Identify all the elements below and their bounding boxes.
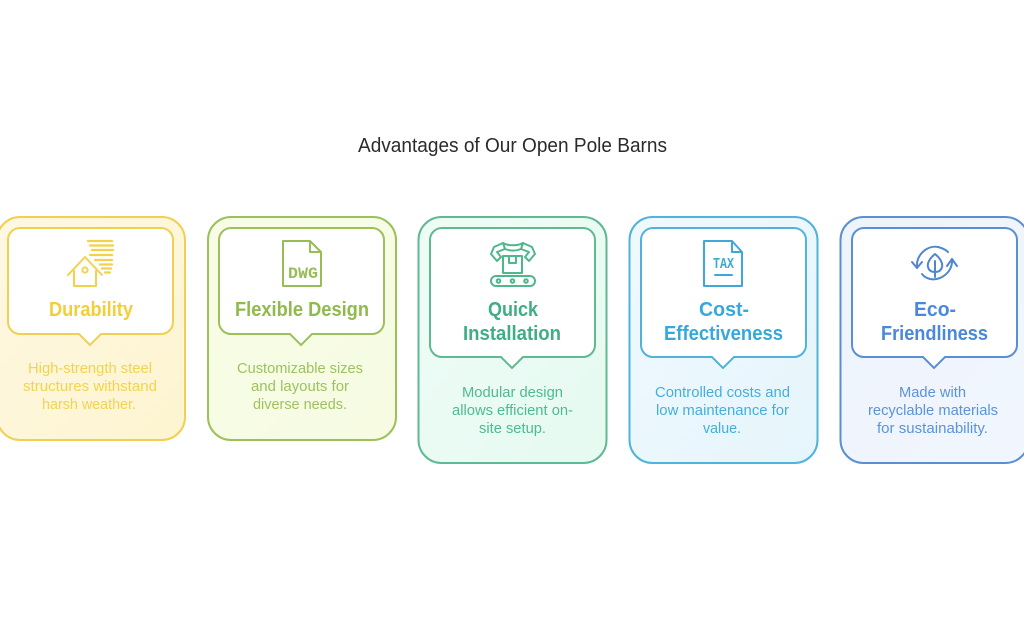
heading callout <box>641 228 806 368</box>
description <box>868 384 998 437</box>
description: structures withstand <box>23 378 157 395</box>
panel: quick installation <box>418 217 606 463</box>
description <box>452 384 573 437</box>
heading: Friendliness <box>881 322 988 345</box>
description: site setup. <box>479 420 546 437</box>
description: Modular design <box>462 384 563 401</box>
card background <box>418 217 606 463</box>
icon: tax document <box>704 241 742 286</box>
description: allows efficient on- <box>452 402 573 419</box>
heading: Durability <box>49 298 134 321</box>
heading <box>664 298 783 345</box>
description: harsh weather. <box>42 396 136 413</box>
description: Controlled costs and <box>655 384 790 401</box>
heading callout <box>219 228 384 345</box>
heading <box>881 298 988 345</box>
card background <box>840 217 1024 463</box>
description <box>655 384 790 437</box>
heading: Quick <box>488 298 539 321</box>
icon: recycle leaf <box>912 247 957 279</box>
heading callout <box>430 228 595 368</box>
description: for sustainability. <box>877 420 988 437</box>
heading callout <box>852 228 1017 368</box>
icon: tax document: TAX <box>713 256 734 273</box>
heading: Effectiveness <box>664 322 783 345</box>
description <box>23 360 157 413</box>
description <box>237 360 363 413</box>
description: and layouts for <box>251 378 349 395</box>
icon: robot arms and conveyor <box>491 243 535 286</box>
description: value. <box>703 420 741 437</box>
description: recyclable materials <box>868 402 998 419</box>
icon: DWG file <box>283 241 321 286</box>
heading callout <box>8 228 173 345</box>
heading: Eco- <box>914 298 956 321</box>
heading: Flexible Design <box>235 298 369 321</box>
card background <box>630 217 818 463</box>
panel: cost-effectiveness <box>630 217 818 463</box>
heading <box>463 298 561 345</box>
description: diverse needs. <box>253 396 347 413</box>
panel: eco-friendliness <box>840 217 1024 463</box>
heading: Installation <box>463 322 561 345</box>
description: low maintenance for <box>656 402 789 419</box>
panel: flexible design <box>208 217 396 440</box>
description: Made with <box>899 384 966 401</box>
description: High-strength steel <box>28 360 152 377</box>
title: Advantages of Our Open Pole Barns <box>358 135 667 157</box>
description: Customizable sizes <box>237 360 363 377</box>
heading: Cost- <box>699 298 749 321</box>
card background <box>208 217 396 440</box>
panel: durability <box>0 217 185 440</box>
icon: DWG file: DWG <box>288 265 318 283</box>
icon: house and tornado <box>68 241 113 286</box>
card background <box>0 217 185 440</box>
